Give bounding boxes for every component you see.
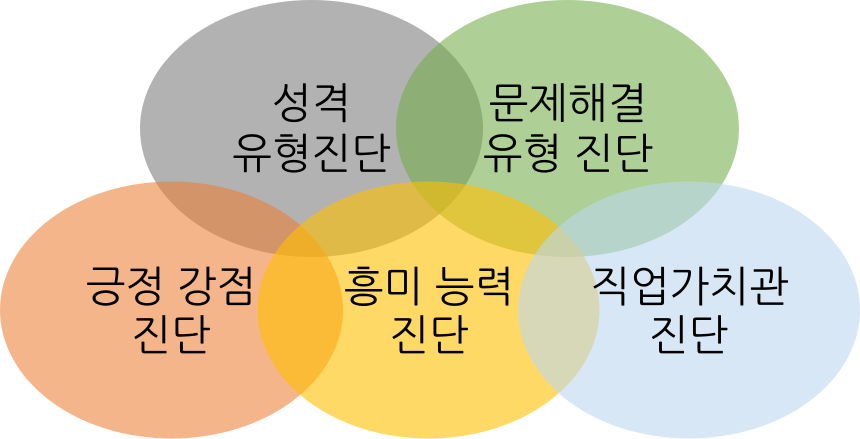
label: 직업가치관 진단: 진단 (649, 312, 728, 359)
label: 흥미 능력 진단: 진단 (389, 312, 469, 359)
label: 성격 유형진단: 유형진단 (232, 130, 391, 178)
label: 성격 유형진단: 성격 (272, 80, 351, 127)
circle: 긍정 강점 진단 (0, 182, 343, 438)
label: 흥미 능력 진단 (344, 264, 514, 359)
circle: 직업가치관 진단 (518, 182, 860, 438)
circle: 문제해결 유형 진단 (396, 0, 739, 257)
label: 문제해결 유형 진단: 유형 진단 (483, 130, 653, 178)
label: 흥미 능력 진단: 흥미 능력 (344, 264, 514, 310)
label: 문제해결 유형 진단 (483, 80, 653, 178)
circle: 흥미 능력 진단 (258, 182, 600, 438)
label: 직업가치관 진단: 직업가치관 (590, 264, 789, 310)
label: 성격 유형진단 (232, 80, 391, 178)
label: 긍정 강점 진단: 긍정 강점 (86, 264, 256, 310)
label: 직업가치관 진단 (590, 264, 789, 359)
label: 긍정 강점 진단: 진단 (131, 312, 211, 359)
label: 긍정 강점 진단 (86, 264, 256, 359)
circle: 성격 유형진단 (140, 0, 483, 257)
label: 문제해결 유형 진단: 문제해결 (489, 80, 647, 127)
